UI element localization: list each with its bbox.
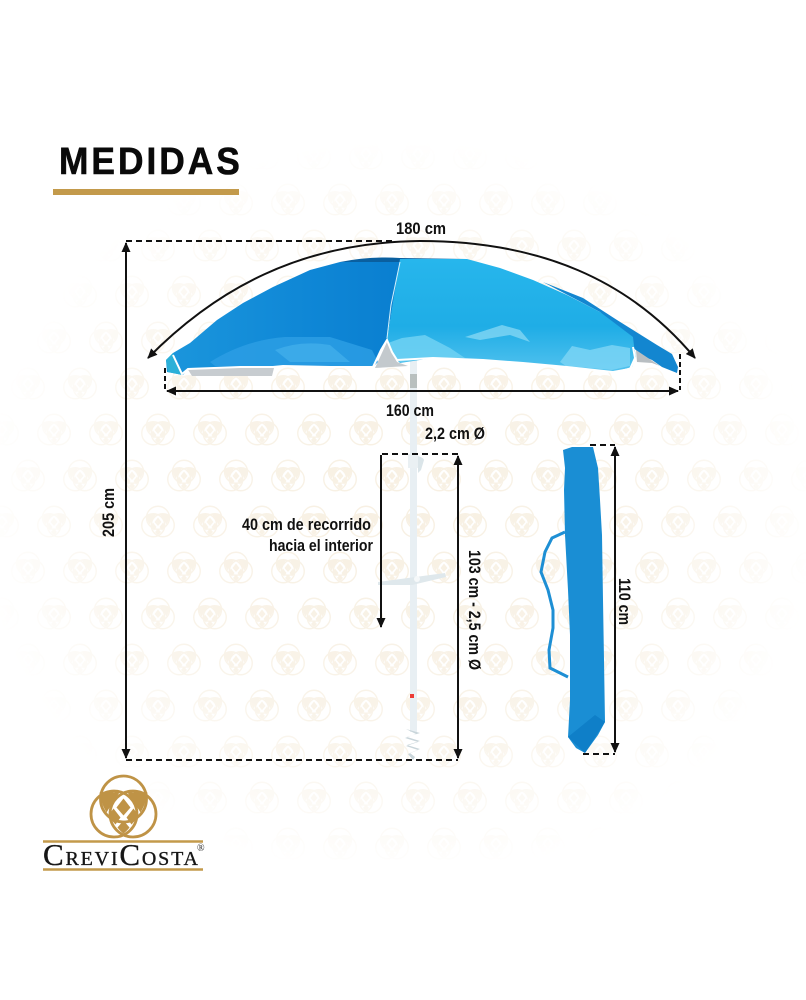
apex underside bbox=[375, 342, 408, 368]
white hems bbox=[173, 340, 635, 374]
dimension: 180 cm arc bbox=[148, 220, 695, 358]
logo symbol bbox=[91, 776, 156, 837]
label 103 cm: 103 cm - 2,5 cm Ø bbox=[465, 550, 483, 670]
left underside bbox=[187, 368, 274, 376]
left front panel bbox=[166, 262, 400, 375]
label 180 cm: 180 cm bbox=[396, 220, 446, 238]
bag body bbox=[563, 447, 605, 753]
bag strap bbox=[541, 532, 568, 677]
label: hacia el interior: hacia el interior bbox=[269, 537, 373, 555]
carry bag bbox=[541, 447, 605, 753]
left highlights bbox=[210, 337, 378, 367]
logo rules bbox=[43, 842, 203, 870]
right center panel bbox=[387, 259, 636, 372]
label: 2,2 cm diameter: 2,2 cm Ø bbox=[425, 425, 485, 443]
right highlights bbox=[388, 335, 465, 362]
label 205 cm: 205 cm bbox=[100, 488, 118, 537]
pole bbox=[378, 360, 446, 760]
label 110 cm: 110 cm bbox=[615, 578, 633, 625]
watermark pattern background bbox=[40, 193, 758, 814]
registered mark: ® bbox=[197, 843, 205, 854]
right back panel bbox=[543, 282, 678, 373]
umbrella canopy bbox=[166, 258, 678, 376]
logo wordmark: CREVICOSTA bbox=[43, 837, 199, 872]
canopy top dark band bbox=[340, 258, 468, 264]
title: MEDIDAS: MEDIDAS bbox=[59, 140, 243, 182]
title underline bbox=[53, 189, 239, 195]
logo: CreviCosta bbox=[43, 776, 205, 872]
dimension: 110 cm bag bbox=[583, 445, 633, 754]
dimension: 205 cm height bbox=[100, 241, 458, 760]
dimension: 160 cm width bbox=[165, 354, 680, 420]
label 40 cm de recorrido: 40 cm de recorrido bbox=[242, 516, 371, 534]
label 160 cm: 160 cm bbox=[386, 402, 434, 420]
